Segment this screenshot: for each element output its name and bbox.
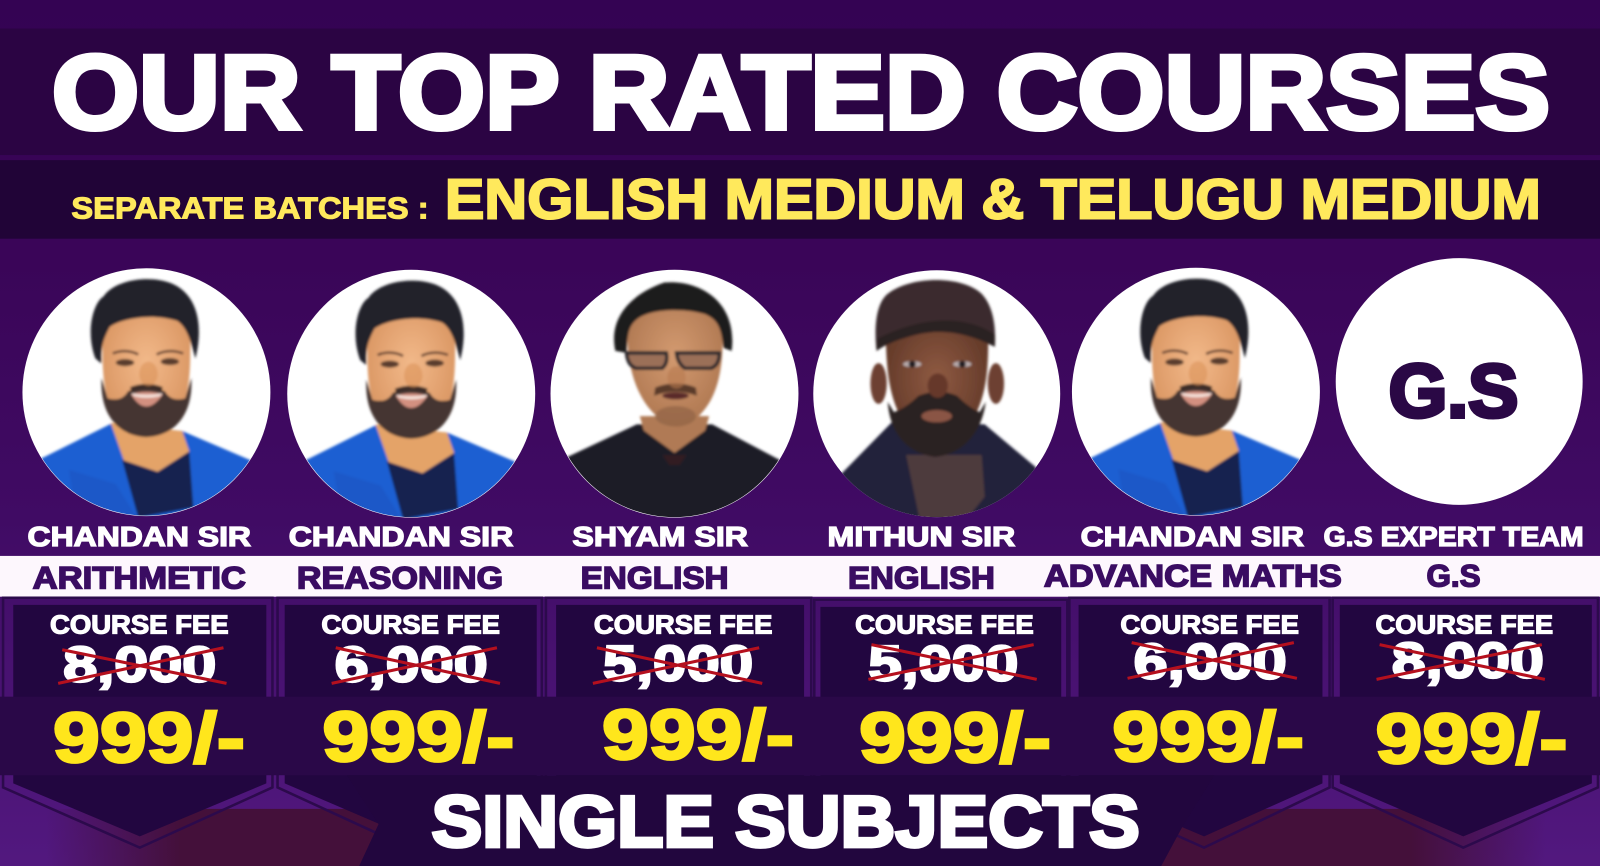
teacher names: MITHUN SIR — [828, 521, 1015, 552]
red cross — [332, 648, 500, 683]
red cross — [593, 648, 762, 683]
batches label: SEPARATE BATCHES : — [71, 191, 429, 225]
offer prices: 999/- — [1112, 697, 1304, 776]
title: OUR TOP RATED COURSES — [52, 35, 1550, 152]
G.S badge: G.S — [1389, 349, 1518, 433]
red cross — [1128, 643, 1297, 678]
offer prices: 999/- — [859, 698, 1051, 777]
bottom ribbon — [347, 775, 1214, 866]
photo: Chandan Sir advance maths — [1072, 268, 1320, 519]
subject names: G.S — [1427, 559, 1481, 594]
offer prices: 999/- — [1376, 699, 1567, 778]
offer prices: 999/- — [53, 698, 245, 777]
photo: Mithun Sir — [813, 270, 1060, 521]
teacher names: CHANDAN SIR — [1081, 521, 1304, 552]
course fee label: COURSE FEE — [321, 609, 500, 639]
old price: 5,000 — [868, 635, 1018, 691]
course fee label: COURSE FEE — [1376, 609, 1553, 639]
red cross — [58, 648, 227, 683]
old price: 8,000 — [63, 636, 216, 692]
red cross — [868, 645, 1037, 679]
subject names: REASONING — [297, 561, 503, 596]
ribbon heading: SINGLE SUBJECTS — [432, 782, 1140, 863]
fee panel 2 — [278, 598, 542, 848]
subject names: ENGLISH — [581, 561, 729, 596]
offer prices: 999/- — [602, 695, 794, 774]
offer prices — [53, 695, 1567, 778]
photo: Shyam Sir — [551, 270, 798, 521]
fee panel 4 — [814, 600, 1067, 848]
offer prices: 999/- — [322, 697, 514, 776]
red cross — [1377, 645, 1545, 679]
teacher names: SHYAM SIR — [572, 521, 748, 552]
fee panel 3 — [546, 598, 811, 848]
old price: 6,000 — [1134, 633, 1287, 689]
subject names: ARITHMETIC — [33, 561, 246, 596]
old price: 8,000 — [1392, 632, 1544, 688]
subject band — [0, 556, 1600, 597]
price band — [0, 697, 1600, 775]
G.S badge — [1336, 258, 1583, 505]
photo: Chandan Sir reasoning — [287, 270, 535, 521]
teacher names: CHANDAN SIR — [28, 521, 251, 552]
subject names — [33, 559, 1481, 596]
teacher names — [28, 521, 1584, 552]
batches band — [0, 160, 1600, 239]
course fee label: COURSE FEE — [594, 609, 772, 639]
fee panel 1 — [3, 598, 272, 848]
old price: 5,000 — [603, 635, 753, 691]
title band — [0, 29, 1600, 155]
medium text: ENGLISH MEDIUM & TELUGU MEDIUM — [445, 167, 1541, 230]
course fee label: COURSE FEE — [50, 609, 229, 639]
photo: Chandan Sir arithmetic — [22, 268, 270, 520]
course fee label: COURSE FEE — [1120, 609, 1299, 639]
course fee label: COURSE FEE — [855, 609, 1034, 639]
fee panel 6 — [1333, 598, 1598, 848]
teacher names: CHANDAN SIR — [289, 521, 513, 552]
maroon glow behind the bottom — [46, 809, 1546, 866]
subject names: ENGLISH — [848, 561, 995, 596]
teacher names: G.S EXPERT TEAM — [1323, 521, 1584, 552]
fee panel 5 — [1069, 598, 1330, 848]
old price: 6,000 — [335, 636, 488, 692]
subject names: ADVANCE MATHS — [1044, 559, 1342, 594]
